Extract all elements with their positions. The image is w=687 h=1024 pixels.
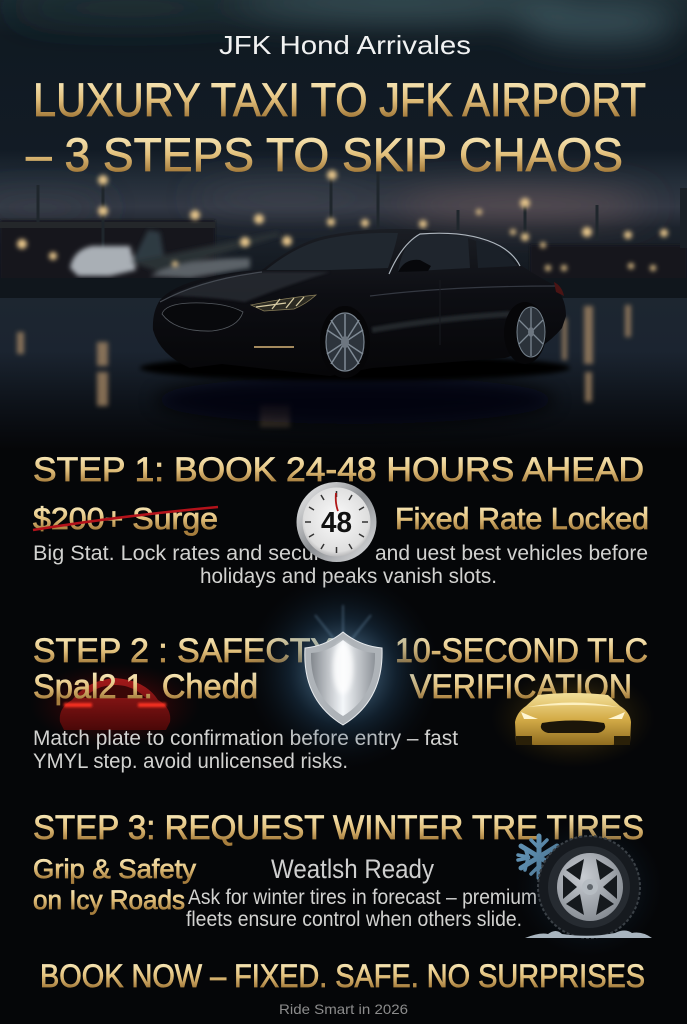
top label: JFK Hond Arrivales [219,30,471,60]
body highlights [160,272,262,302]
panel: step 3 [33,809,663,957]
spot check label: Spal2 1. Chedd [33,668,258,706]
step 2 heading left: STEP 2 : SAFECTY [33,632,333,670]
step 3 body text [186,886,537,931]
icon: 48-hour clock [296,482,376,562]
icon: black luxury sedan [140,229,570,381]
windows [266,233,398,270]
title [26,73,646,181]
step 1 body text: Big Stat. Lock rates and secure [33,542,333,565]
plane [70,230,280,278]
grip and safety label [33,854,196,915]
weather ready label: Weatlsh Ready [271,854,434,884]
icon: winter tire [515,817,663,957]
icon: glowing shield [245,574,441,770]
verification label: VERIFICATION [410,668,632,706]
step 3 body text: Ask for winter tires in forecast – premium [188,886,537,909]
surge price crossed out: $200+ Surge [33,501,218,536]
step 2 body text: Match plate to confirmation before entry – fast [33,727,458,750]
fixed rate label: Fixed Rate Locked [395,501,649,536]
hood sheen [170,272,330,302]
grip and safety label: Grip & Safety [33,854,196,884]
step 3 heading: STEP 3: REQUEST WINTER TRE TIRES [33,809,644,847]
icon: gold car [491,668,655,768]
hero photo: airport at dusk [0,0,687,450]
icon: snowflake [518,836,560,878]
step 1 body text [33,542,648,588]
panel: step 2 [30,574,655,773]
title: – 3 STEPS TO SKIP CHAOS [26,128,623,181]
rear wheel [504,302,546,364]
step 1 body text: and uest best vehicles before [375,542,648,565]
panel: step 1 [33,451,649,588]
step 1 heading: STEP 1: BOOK 24-48 HOURS AHEAD [33,451,644,489]
wet reflections [17,305,631,427]
step 2 body text [33,727,458,773]
step 3 body text: fleets ensure control when others slide. [186,908,522,931]
step 1 body text: holidays and peaks vanish slots. [200,565,497,588]
headlight [251,295,316,311]
footer tagline: Ride Smart in 2026 [279,1001,408,1017]
step 2 heading right: 10-SECOND TLC [395,632,648,670]
front wheel [320,306,370,378]
grip and safety label: on Icy Roads [33,885,185,915]
icon: red car [30,663,200,747]
icon: 48-hour clock: 48 [321,507,352,539]
step 2 body text: YMYL step. avoid unlicensed risks. [33,750,348,773]
rim cut-outs [563,859,617,915]
grille [162,303,243,331]
